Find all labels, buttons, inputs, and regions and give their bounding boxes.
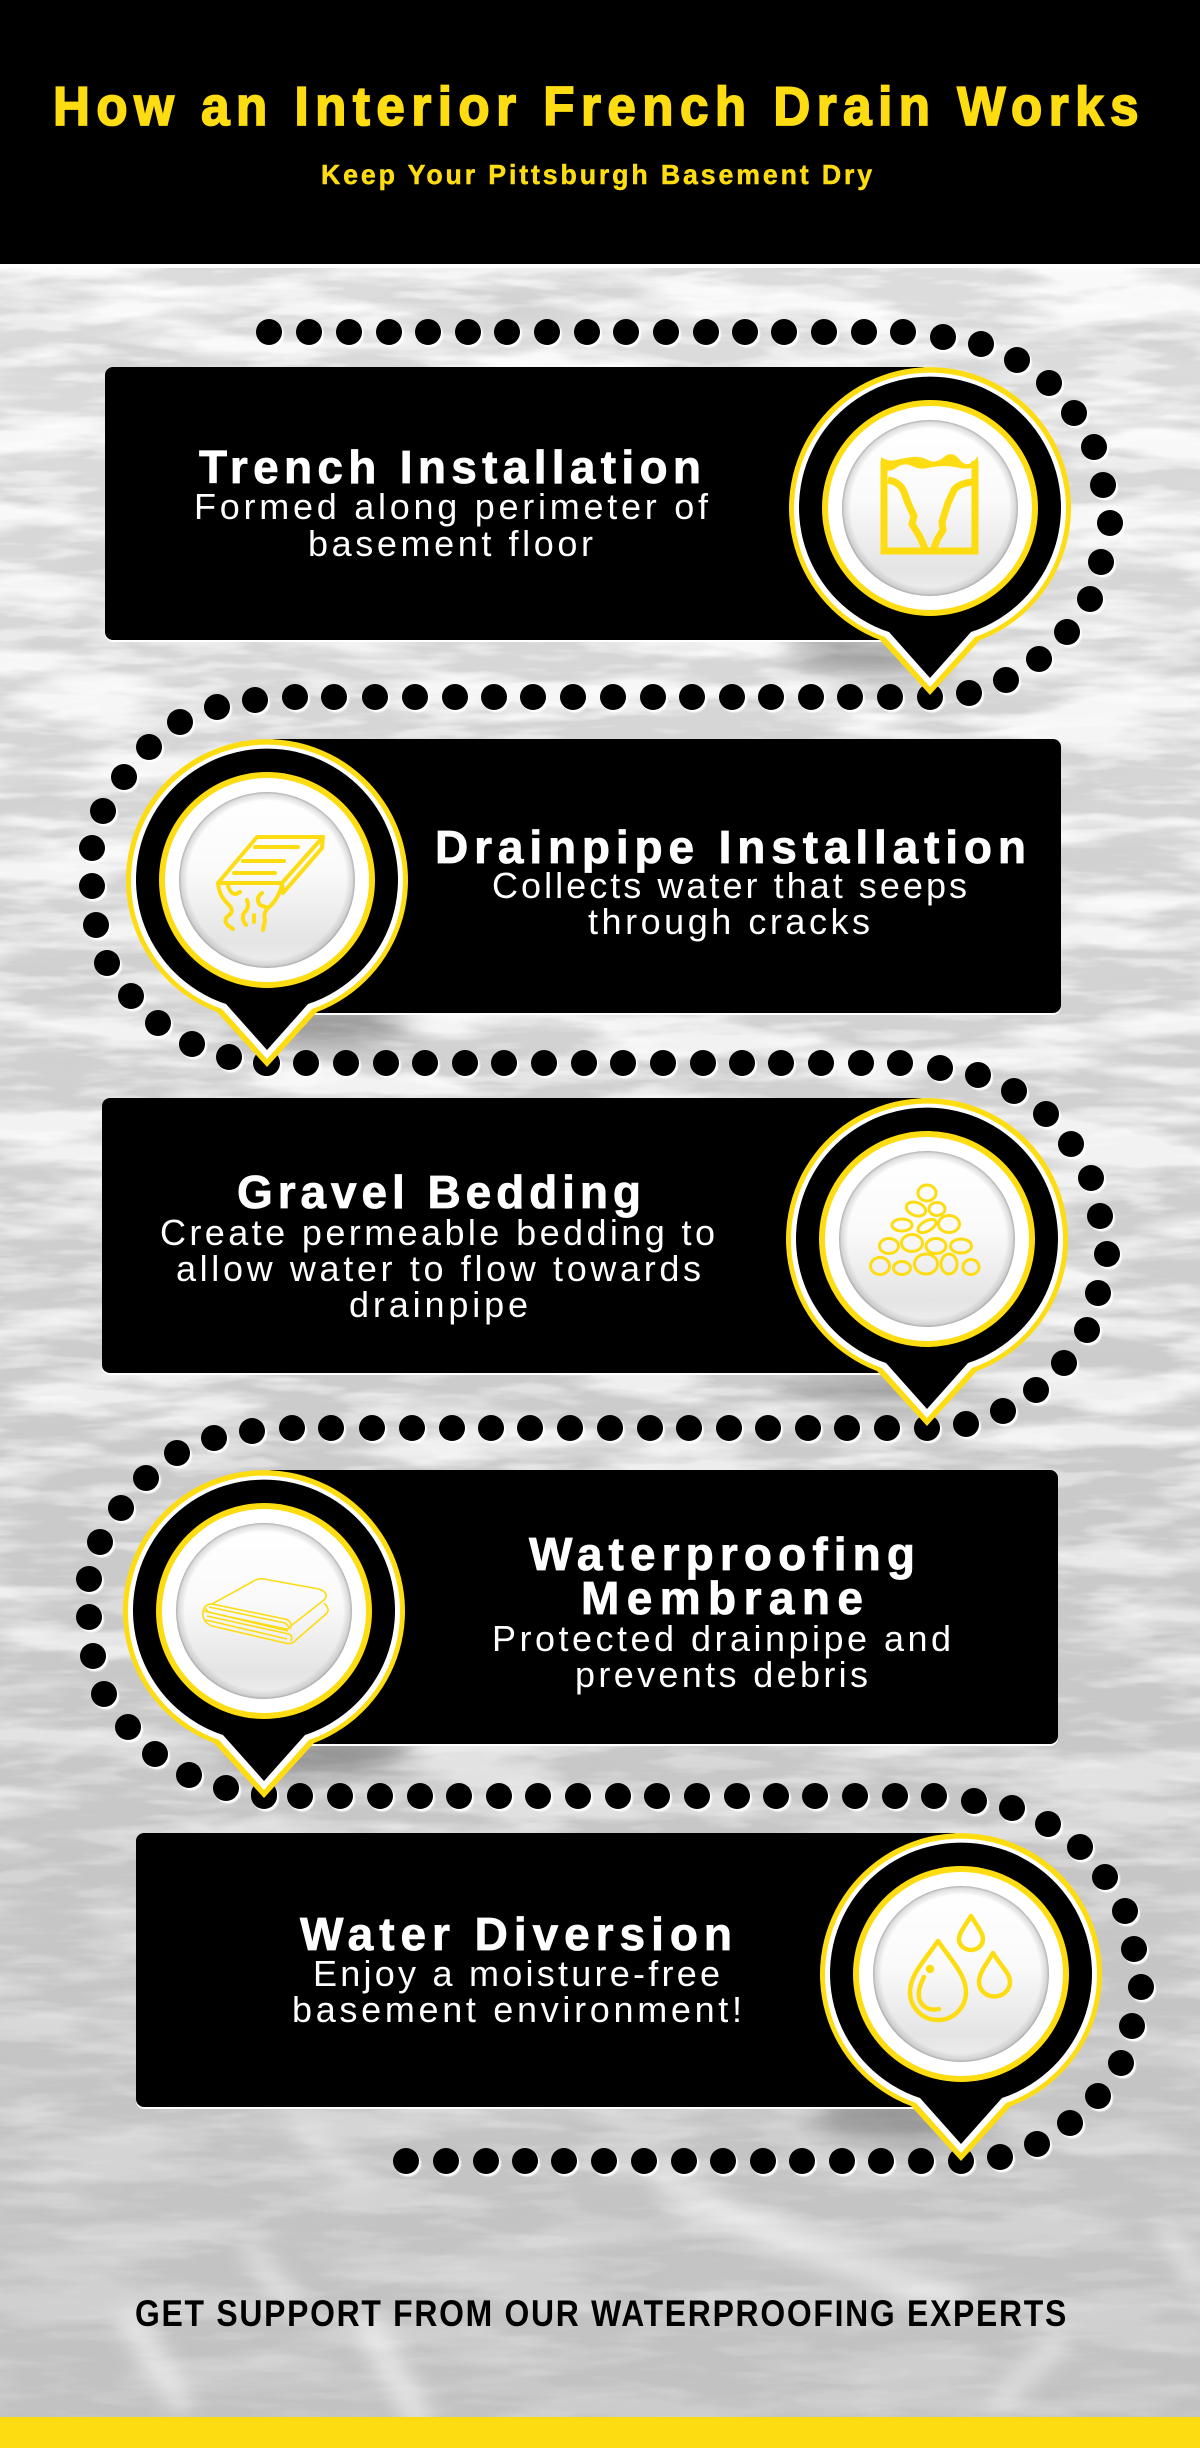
description: allow water to flow towards	[176, 1248, 701, 1289]
icon: trench	[881, 454, 978, 551]
header band	[0, 0, 1200, 268]
description	[194, 486, 709, 564]
pin	[820, 1833, 1102, 2161]
title: How an Interior French Drain Works	[53, 75, 1145, 137]
panel: gravel bedding	[102, 1098, 1068, 1426]
description: Create permeable bedding to	[160, 1212, 715, 1253]
heading: Membrane	[581, 1572, 863, 1624]
description	[292, 1953, 742, 2030]
icon: gravel	[870, 1185, 979, 1274]
description: through cracks	[588, 901, 870, 942]
heading: Drainpipe Installation	[435, 821, 1026, 873]
description: drainpipe	[349, 1284, 528, 1325]
panel: drainpipe installation	[126, 739, 1061, 1067]
pin	[786, 1098, 1068, 1426]
footer bar	[0, 2417, 1200, 2448]
description: basement environment!	[292, 1989, 742, 2030]
description: prevents debris	[575, 1654, 868, 1695]
description	[160, 1212, 715, 1325]
panel: waterproofing membrane	[123, 1470, 1058, 1798]
pin	[123, 1470, 405, 1798]
call to action: GET SUPPORT FROM OUR WATERPROOFING EXPERTS	[135, 2293, 1068, 2334]
description: basement floor	[308, 523, 593, 564]
icon: water drops	[910, 1916, 1010, 2020]
panel: water diversion	[136, 1833, 1102, 2161]
panel: trench installation	[105, 367, 1071, 695]
description: Enjoy a moisture-free	[313, 1953, 720, 1994]
description	[492, 1618, 951, 1695]
description: Collects water that seeps	[492, 865, 967, 906]
dotted trail	[89, 332, 1141, 2161]
subtitle: Keep Your Pittsburgh Basement Dry	[321, 159, 875, 190]
icon: drainpipe	[218, 837, 323, 930]
heading	[529, 1528, 915, 1624]
heading: Water Diversion	[300, 1908, 732, 1960]
heading: Trench Installation	[199, 441, 701, 493]
description	[492, 865, 967, 942]
description: Formed along perimeter of	[194, 486, 709, 527]
dotted trail: white bevel	[91, 334, 1143, 2164]
pin	[126, 739, 408, 1067]
heading: Gravel Bedding	[237, 1166, 641, 1218]
description: Protected drainpipe and	[492, 1618, 951, 1659]
icon: folded membrane	[203, 1579, 328, 1644]
heading: Waterproofing	[529, 1528, 915, 1580]
pin	[789, 367, 1071, 695]
